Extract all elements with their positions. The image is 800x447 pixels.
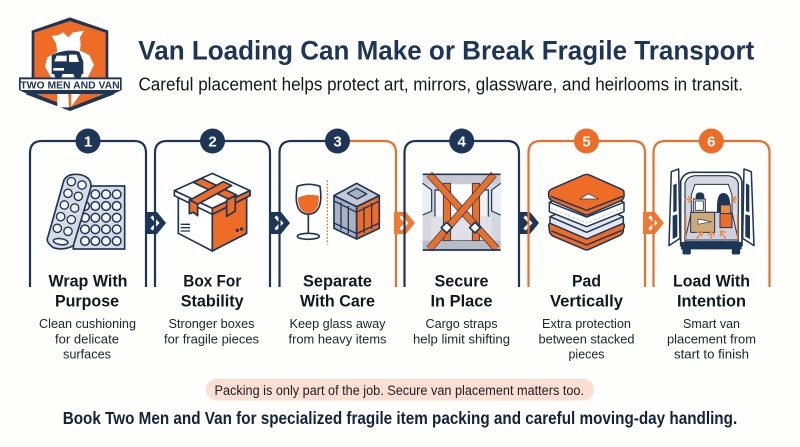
arrow: step 4 to 5 [518, 212, 539, 234]
description: Stronger boxes [168, 317, 254, 331]
icon: cargo straps securing load [423, 174, 501, 250]
icon: wine glass, divider and crate [296, 180, 379, 244]
heading: With Care [300, 292, 375, 311]
description: start to finish [674, 347, 749, 361]
description [538, 317, 635, 361]
step badge 6 [699, 128, 724, 154]
description: Cargo straps [426, 317, 498, 331]
panel: step 1 wrap with purpose [30, 128, 146, 361]
step badge 3 [325, 128, 350, 154]
heading: Purpose [55, 292, 119, 311]
heading [673, 272, 750, 311]
description: Clean cushioning [39, 317, 136, 331]
heading [181, 272, 244, 311]
description [288, 317, 386, 346]
icon: stacked moving pads [549, 174, 624, 250]
step badge 6: 6 [707, 134, 715, 150]
step badge 5 [574, 128, 599, 154]
heading: Secure [434, 272, 488, 291]
heading [48, 272, 128, 311]
arrow: step 2 to 3 [269, 212, 290, 234]
heading: Pad [572, 272, 601, 291]
description: for delicate [55, 332, 119, 346]
step badge 3: 3 [333, 134, 342, 150]
description: between stacked [538, 332, 635, 346]
heading: Vertically [550, 292, 624, 311]
heading: Wrap With [48, 272, 128, 291]
step badge 4: 4 [458, 134, 467, 150]
step badge 2 [200, 128, 225, 154]
panel: step 2 box for stability [155, 128, 270, 346]
arrow: step 3 to 4 [394, 212, 415, 234]
logo: Two Men and Van badge [19, 17, 122, 111]
description: Keep glass away [290, 317, 386, 331]
description: surfaces [63, 347, 111, 361]
heading: Stability [181, 292, 244, 311]
heading: Separate [303, 272, 372, 291]
arrow: step 1 to 2 [145, 212, 166, 234]
step badge 4 [449, 128, 474, 154]
icon: loaded van rear view [669, 169, 754, 254]
description: Smart van [683, 317, 740, 331]
description [39, 317, 136, 361]
description [667, 317, 756, 361]
panel: step 3 separate with care [280, 128, 396, 346]
heading: Box For [183, 272, 242, 291]
heading: In Place [430, 292, 492, 311]
heading: Load With [673, 272, 750, 291]
callout pill [206, 379, 594, 400]
heading [430, 272, 492, 311]
step badge 1: 1 [84, 134, 92, 150]
panel: step 4 secure in place [404, 128, 519, 346]
description: help limit shifting [413, 332, 510, 346]
icon: bubble wrap roll [47, 174, 125, 249]
description [164, 317, 259, 346]
description: Extra protection [542, 317, 631, 331]
step badge 2: 2 [208, 134, 217, 150]
callout pill: Packing is only part of the job. Secure van placement matters too. [214, 383, 584, 398]
heading [300, 272, 375, 311]
heading [550, 272, 624, 311]
step badge 1 [76, 128, 100, 154]
step badge 5: 5 [582, 134, 591, 150]
panel: step 5 pad vertically [528, 128, 645, 361]
description: pieces [568, 347, 604, 361]
icon: taped cardboard box [174, 173, 250, 251]
logo: Two Men and Van badge: TWO MEN AND VAN [20, 81, 120, 92]
panel: step 6 load with intention [654, 128, 770, 361]
subtitle: Careful placement helps protect art, mirrors, glassware, and heirlooms in transit. [138, 74, 743, 94]
heading: Intention [677, 292, 746, 311]
description: for fragile pieces [164, 332, 259, 346]
description [413, 317, 510, 346]
title: Van Loading Can Make or Break Fragile Transport [138, 36, 754, 66]
description: placement from [667, 332, 756, 346]
description: from heavy items [288, 332, 386, 346]
arrow: step 5 to 6 [643, 212, 664, 234]
